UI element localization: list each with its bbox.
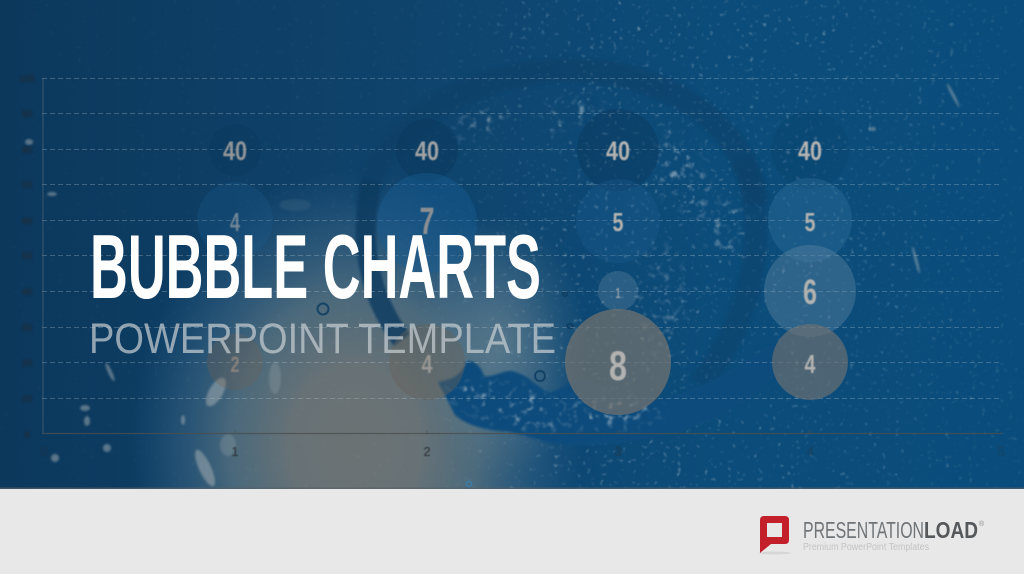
wordmark: PRESENTATION (803, 517, 924, 543)
x axis labels: 1 (231, 444, 239, 459)
title: BUBBLE CHARTS (90, 217, 541, 318)
subtitle: POWERPOINT TEMPLATE (89, 315, 556, 363)
bubble values: 4 (804, 349, 816, 379)
bubble values: 5 (612, 207, 624, 237)
bubbles: row 3 (598, 245, 856, 337)
x axis labels: 2 (423, 444, 431, 459)
bubble values: 1 (616, 285, 620, 302)
y axis labels: 80 (22, 145, 32, 155)
y axis labels: 100 (19, 74, 35, 84)
bubble values: 8 (609, 342, 627, 389)
y axis labels: 70 (22, 180, 32, 190)
bubbles: row 40 (209, 109, 849, 191)
bubbles: row 4 (207, 309, 848, 415)
foam clusters (446, 96, 750, 433)
axes (42, 78, 1002, 434)
bubble values: 5 (804, 207, 816, 237)
droplets (318, 292, 573, 486)
bubble values: 40 (606, 136, 630, 166)
bubble values: 40 (798, 136, 822, 166)
y axis labels: 50 (22, 251, 32, 261)
y axis labels: 90 (22, 109, 32, 119)
splash ring (366, 70, 790, 446)
logo: PresentationLoad: LOAD (924, 517, 978, 543)
y axis labels (19, 74, 35, 440)
bubble values: 2 (230, 352, 240, 377)
bubble chart (19, 74, 1005, 459)
bubble values: 6 (803, 273, 817, 312)
x axis labels: 5 (997, 444, 1005, 459)
y axis labels: 40 (22, 287, 32, 297)
bubbles: row 2 (197, 173, 852, 273)
x axis labels: 3 (614, 444, 622, 459)
y axis labels: 60 (22, 216, 32, 226)
gridlines (42, 78, 1000, 398)
y axis labels: 20 (22, 358, 32, 368)
bubble values (223, 136, 822, 389)
y axis labels: 0 (24, 430, 30, 440)
y axis labels: 30 (22, 323, 32, 333)
light glow area (120, 170, 590, 489)
logo: PresentationLoad (759, 516, 985, 554)
bubble values: 7 (420, 201, 434, 243)
tagline: Premium PowerPoint Templates (803, 541, 929, 553)
x axis labels: 4 (806, 444, 814, 459)
bubble values: 4 (230, 207, 240, 237)
footer band (0, 489, 1024, 574)
logo: PresentationLoad: ® (979, 520, 985, 528)
x axis labels: 0 (40, 444, 48, 459)
speckle texture (297, 0, 1024, 489)
bubble values: 4 (422, 349, 433, 379)
y axis labels: 10 (22, 394, 32, 404)
bubble values: 40 (223, 136, 247, 166)
icon: red speech-bubble P (759, 516, 791, 554)
bubble values: 40 (415, 136, 439, 166)
x axis labels (40, 444, 1005, 459)
scattered flecks (25, 83, 960, 489)
